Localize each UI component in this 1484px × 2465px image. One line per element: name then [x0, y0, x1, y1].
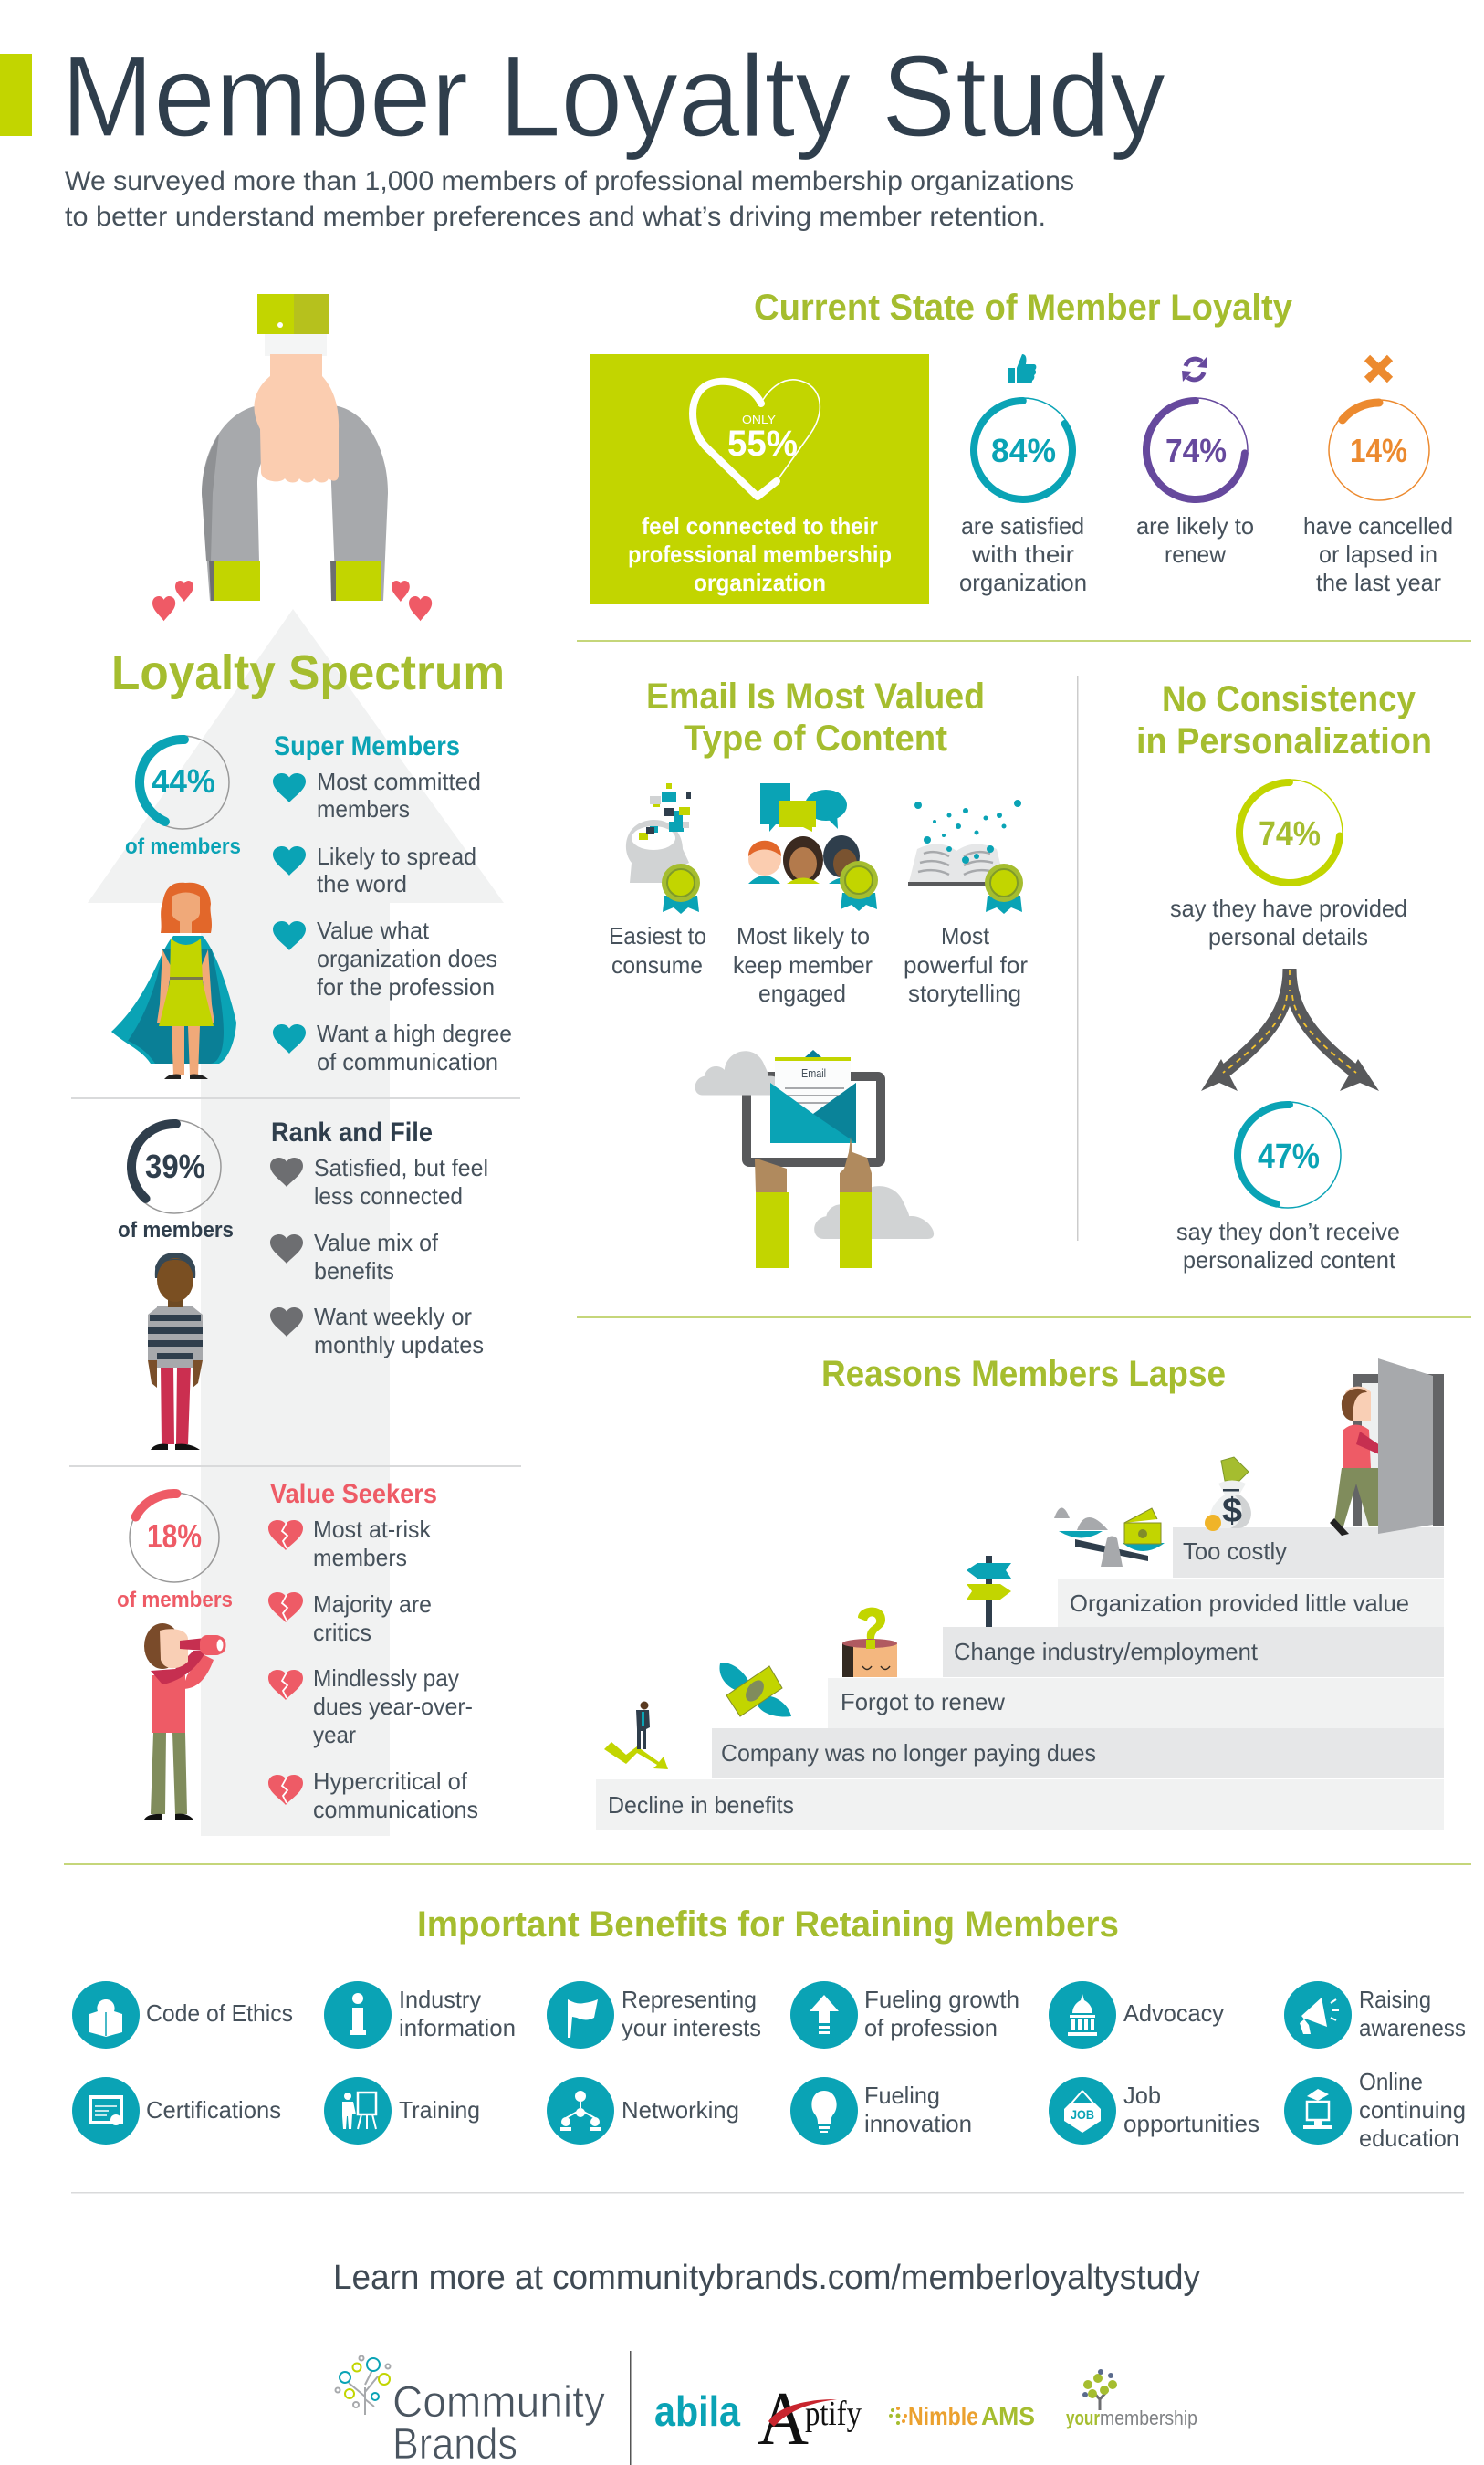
- logo: abila: abila: [654, 2387, 740, 2435]
- stat: 14% lapsed: or lapsed in: [1319, 540, 1437, 568]
- icon: people and speech bubbles: [748, 783, 878, 911]
- benefit: job opportunities: [1049, 2077, 1259, 2145]
- heading: Email Is Most Valued: [646, 677, 985, 717]
- heading: Super Members: [274, 731, 460, 761]
- logo: aptify: [758, 2376, 862, 2461]
- list: value seeker traits: Majority are: [313, 1590, 432, 1618]
- heading: Important Benefits for Retaining Members: [417, 1904, 1119, 1945]
- list: super member traits: of communication: [317, 1048, 498, 1075]
- logo: aptify: ptify: [805, 2395, 862, 2433]
- logo: aptify: A: [758, 2376, 809, 2461]
- benefit: fueling innovation: Fueling: [864, 2082, 940, 2109]
- stat: 14% lapsed: 14%: [1350, 432, 1407, 469]
- benefit: networking: [547, 2077, 739, 2145]
- benefit: certifications: [72, 2077, 281, 2145]
- list: super member traits: organization does: [317, 945, 497, 972]
- icon: man on declining arrow: [604, 1702, 668, 1769]
- panel: 55% callout: professional membership: [628, 540, 892, 568]
- figure: value seeker with telescope: [144, 1623, 225, 1820]
- stat: 14% lapsed: [1303, 358, 1453, 596]
- icon: open book with stars: [908, 800, 1023, 914]
- benefit: raising awareness: [1284, 1981, 1466, 2049]
- list: value seeker traits: members: [313, 1544, 407, 1571]
- stat: 14% lapsed: the last year: [1316, 569, 1441, 596]
- panel: super members: [111, 726, 512, 1079]
- title: Member Loyalty Study: [61, 31, 1165, 161]
- stat: 74% renew: 74%: [1165, 432, 1227, 469]
- list: super member traits: the word: [317, 870, 407, 897]
- gauge: 44%: [125, 726, 241, 859]
- call to action: Learn more at communitybrands.com/memberloyaltystudy: [333, 2259, 1200, 2297]
- heading: Value Seekers: [270, 1479, 437, 1509]
- panel: reasons members lapse: [596, 1354, 1444, 1830]
- stat: 74% renew: [1136, 357, 1254, 568]
- list: rank and file traits: benefits: [314, 1257, 394, 1285]
- heading: in Personalization: [1136, 721, 1432, 761]
- heading: [1136, 679, 1432, 761]
- list: value seeker traits: dues year-over-: [313, 1693, 473, 1720]
- list: super member traits: Value what: [317, 917, 430, 944]
- benefit: raising awareness: awareness: [1359, 2014, 1466, 2041]
- list: super member traits: Want a high degree: [317, 1020, 512, 1047]
- icon: heart gauge: [693, 380, 820, 497]
- email captions: Most: [941, 922, 990, 949]
- benefit: fueling growth: of profession: [864, 2014, 998, 2041]
- step: forgot to renew: Forgot to renew: [841, 1688, 1005, 1715]
- list: rank and file traits: [270, 1154, 488, 1358]
- illustration: tablet with email: [695, 1050, 934, 1268]
- list: value seeker traits: Hypercritical of: [313, 1767, 468, 1795]
- icon: flying money: [719, 1663, 791, 1716]
- benefit: representing interests: your interests: [622, 2014, 761, 2041]
- gauge: 44%: 44%: [152, 762, 215, 800]
- gauge: 74%: 74%: [1259, 815, 1321, 854]
- figure: rank and file member: [148, 1253, 203, 1450]
- panel: personalization: [1136, 679, 1432, 1274]
- intro text: We surveyed more than 1,000 members of professional membership organizations: [65, 166, 1074, 196]
- email captions: engaged: [758, 980, 846, 1007]
- benefit: advocacy: [1049, 1981, 1224, 2049]
- list: super member traits: Most committed: [317, 768, 481, 795]
- icon: thumbs up: [1008, 354, 1036, 383]
- benefit: industry information: information: [399, 2014, 516, 2041]
- benefit: raising awareness: Raising: [1359, 1986, 1431, 2013]
- stat: 74% renew: are likely to: [1136, 512, 1254, 540]
- panel: 55% callout: feel connected to their: [642, 512, 878, 540]
- step: decline in benefits: Decline in benefits: [608, 1791, 794, 1819]
- benefit: industry information: Industry: [399, 1986, 481, 2013]
- logo: your membership: [1066, 2369, 1197, 2429]
- step: too costly: [1173, 1527, 1444, 1578]
- stat: 74% renew: renew: [1165, 540, 1226, 568]
- benefit: job opportunities: opportunities: [1123, 2110, 1259, 2137]
- hearts around magnet: [152, 581, 432, 621]
- list: rank and file traits: Value mix of: [314, 1229, 439, 1256]
- stat: 84% satisfied: [955, 354, 1092, 596]
- benefit: training: Training: [399, 2096, 480, 2124]
- icon: sleeping head with question mark: [842, 1608, 897, 1677]
- email captions: consume: [611, 951, 703, 979]
- benefit: fueling growth: [790, 1981, 1019, 2049]
- email captions: Most likely to: [737, 922, 870, 949]
- logo: nimble ams: [889, 2402, 1035, 2430]
- benefit: networking: Networking: [622, 2096, 739, 2124]
- email captions: powerful for: [904, 951, 1028, 979]
- background arrow: [88, 609, 504, 1836]
- figure: super member with cape: [111, 883, 236, 1079]
- list: super member traits: members: [317, 795, 410, 823]
- gauge: 47%: 47%: [1258, 1138, 1320, 1176]
- list: value seeker traits: [268, 1516, 478, 1823]
- panel: email content: [609, 677, 1028, 1268]
- panel: 55% callout: ONLY: [742, 413, 776, 426]
- benefit: fueling innovation: innovation: [864, 2110, 972, 2137]
- intro text: [65, 166, 1074, 232]
- panel: 55% callout: [590, 354, 929, 604]
- benefit: online education: [1284, 2068, 1466, 2152]
- gauge: 74%: [1237, 780, 1343, 886]
- benefit: fueling innovation: [790, 2077, 972, 2145]
- logo: nimble ams: AMS: [981, 2402, 1035, 2430]
- illustration: hand holding magnet: [202, 294, 388, 601]
- illustration: person leaving through door: [1330, 1358, 1444, 1536]
- benefit: code of ethics: [72, 1981, 293, 2049]
- benefit: training: [324, 2077, 480, 2145]
- email captions: keep member: [733, 951, 873, 979]
- benefit: certifications: Certifications: [146, 2096, 281, 2124]
- icon: balance scale: [1054, 1508, 1165, 1567]
- gauge: 39%: of members: [118, 1218, 234, 1243]
- list: value seeker traits: Mindlessly pay: [313, 1664, 459, 1692]
- logo: community brands: [336, 2355, 605, 2465]
- stat: 84% satisfied: with their: [971, 540, 1074, 568]
- caption: say they have provided: [1170, 895, 1407, 922]
- logo: nimble ams: Nimble: [908, 2402, 978, 2430]
- gauge: 18%: 18%: [147, 1517, 202, 1555]
- list: value seeker traits: year: [313, 1721, 356, 1748]
- heading: Type of Content: [684, 719, 947, 759]
- step: change industry: Change industry/employment: [954, 1638, 1259, 1665]
- list: rank and file traits: monthly updates: [314, 1331, 484, 1358]
- logo: your membership: membership: [1100, 2407, 1197, 2429]
- gauge: 18%: of members: [117, 1588, 233, 1612]
- icon: renew arrows: [1182, 357, 1207, 382]
- benefit: representing interests: [547, 1981, 761, 2049]
- caption: [1176, 1218, 1400, 1274]
- heading: Rank and File: [271, 1117, 433, 1148]
- icon: tree: [336, 2355, 391, 2415]
- gauge: 44%: of members: [125, 834, 241, 859]
- benefit: advocacy: Advocacy: [1123, 1999, 1224, 2027]
- icon: head with envelopes: [626, 783, 700, 914]
- icon: signpost: [967, 1556, 1011, 1627]
- panel: benefits: [72, 1904, 1466, 2152]
- benefit: online education: education: [1359, 2124, 1459, 2152]
- panel: rank and file: [114, 1107, 488, 1450]
- heading: current state: Current State of Member Loyalty: [754, 288, 1293, 328]
- heading: No Consistency: [1162, 679, 1416, 719]
- gauge: 39%: [114, 1107, 235, 1243]
- stat: 84% satisfied: are satisfied: [961, 512, 1084, 540]
- list: value seeker traits: critics: [313, 1619, 371, 1646]
- benefit: fueling growth: Fueling growth: [864, 1986, 1019, 2013]
- email captions: Easiest to: [609, 922, 706, 949]
- caption: say they don’t receive: [1176, 1218, 1400, 1245]
- intro text: to better understand member preferences and what’s driving member retention.: [65, 202, 1046, 232]
- step: change industry: [943, 1627, 1444, 1677]
- panel: value seekers: [115, 1478, 478, 1823]
- stat: 84% satisfied: organization: [959, 569, 1087, 596]
- step: little value: [1058, 1579, 1444, 1627]
- step: little value: Organization provided little value: [1070, 1589, 1409, 1617]
- step: forgot to renew: [828, 1678, 1444, 1728]
- icon: cross: [1367, 358, 1390, 380]
- magnet: [202, 405, 388, 601]
- icon: money bag: $: [1222, 1492, 1242, 1530]
- email captions: storytelling: [908, 980, 1021, 1007]
- panel: 55% callout: 55%: [727, 424, 798, 464]
- heading: [646, 677, 985, 759]
- caption: personalized content: [1183, 1246, 1396, 1274]
- list: super member traits: for the profession: [317, 973, 495, 1001]
- list: rank and file traits: Satisfied, but feel: [314, 1154, 488, 1181]
- icon: money bag: [1205, 1457, 1251, 1531]
- benefit: job opportunities: JOB: [1071, 2107, 1094, 2122]
- heading: Reasons Members Lapse: [821, 1354, 1226, 1394]
- step: company no longer paying: [712, 1728, 1444, 1778]
- step: company no longer paying: Company was no longer paying dues: [721, 1739, 1096, 1767]
- gauge: 47%: [1228, 1095, 1348, 1215]
- email captions: [609, 922, 1028, 1007]
- list: value seeker traits: communications: [313, 1796, 478, 1823]
- gauge: 18%: [115, 1478, 234, 1612]
- step: decline in benefits: [596, 1779, 1444, 1830]
- benefit: code of ethics: Code of Ethics: [146, 1999, 293, 2027]
- list: super member traits: [273, 768, 512, 1075]
- title accent bar: [0, 54, 32, 136]
- logo: your membership: your: [1066, 2407, 1100, 2429]
- benefit: online education: Online: [1359, 2068, 1423, 2095]
- benefit: job opportunities: Job: [1123, 2082, 1161, 2109]
- benefit: representing interests: Representing: [622, 1986, 757, 2013]
- icon: forked road: [1201, 969, 1379, 1091]
- illustration: tablet with email: Email: [801, 1066, 826, 1080]
- caption: personal details: [1208, 923, 1368, 950]
- heading: loyalty spectrum: Loyalty Spectrum: [111, 645, 505, 700]
- stat: 14% lapsed: have cancelled: [1303, 512, 1453, 540]
- list: rank and file traits: Want weekly or: [314, 1303, 472, 1330]
- logo: community brands: Community: [392, 2378, 605, 2427]
- list: value seeker traits: Most at-risk: [313, 1516, 432, 1543]
- panel: 55% callout: organization: [694, 569, 826, 596]
- list: super member traits: Likely to spread: [317, 843, 476, 870]
- benefit: industry information: [324, 1981, 516, 2049]
- gauge: 39%: 39%: [145, 1148, 205, 1185]
- step: too costly: Too costly: [1183, 1537, 1287, 1565]
- stat: 84% satisfied: 84%: [991, 432, 1056, 469]
- benefit: online education: continuing: [1359, 2096, 1466, 2124]
- list: rank and file traits: less connected: [314, 1182, 463, 1210]
- caption: [1170, 895, 1407, 950]
